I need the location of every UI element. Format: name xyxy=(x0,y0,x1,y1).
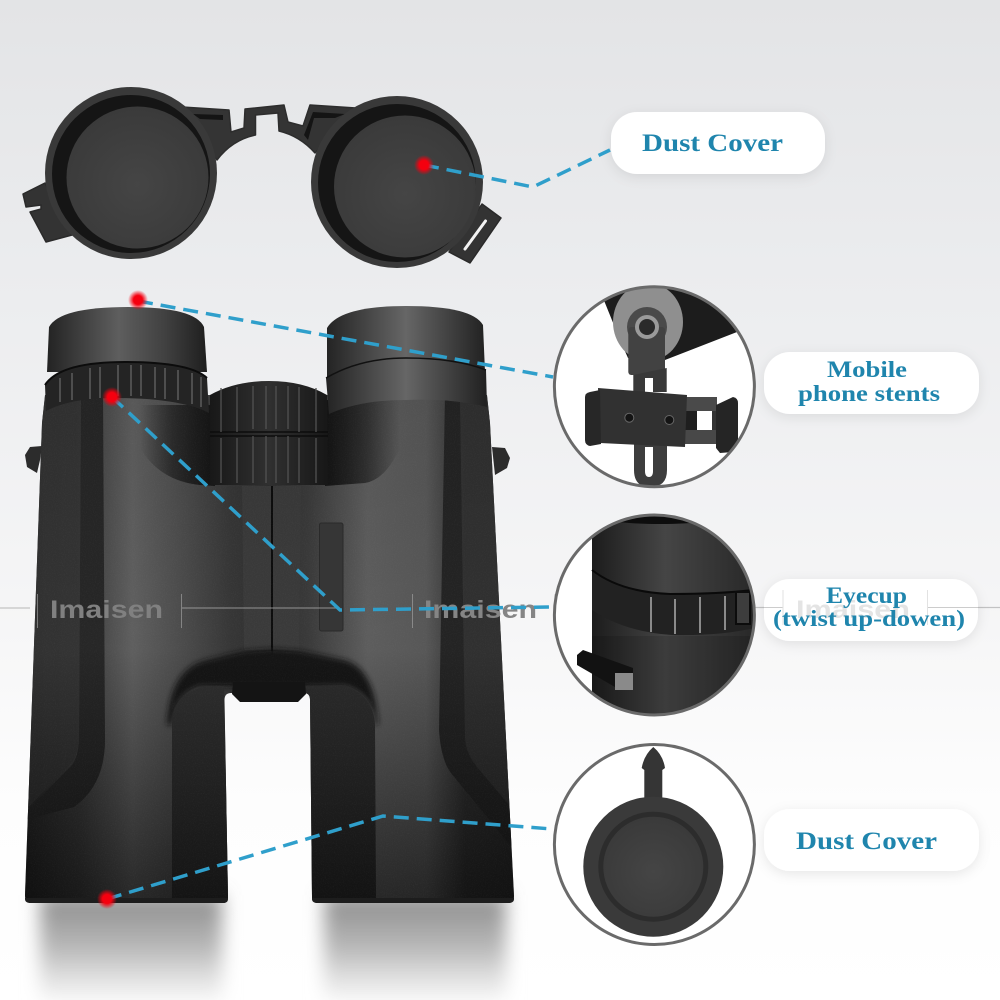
watermark: Imaisen left: Imaisen xyxy=(50,596,163,624)
strap lug xyxy=(577,650,633,690)
label: Mobile phone stents xyxy=(764,352,979,414)
top of cup xyxy=(622,516,690,524)
barrel shadow xyxy=(660,636,674,713)
callout: eyecup leader xyxy=(112,397,550,610)
right clamp pad xyxy=(716,397,738,453)
product: binoculars xyxy=(20,306,520,910)
detail circle: phone mount xyxy=(554,270,754,487)
label: Eyecup twist: Imaisen xyxy=(796,596,910,624)
saddle recess left xyxy=(140,405,215,486)
focus knob underside xyxy=(232,682,306,702)
base rims xyxy=(25,898,514,903)
left eyecup xyxy=(45,307,209,413)
right cap xyxy=(311,96,483,268)
upper bracket xyxy=(627,307,667,375)
left dark grip panel xyxy=(25,395,105,820)
left neck strap lug xyxy=(25,446,42,473)
binocular ground shadows xyxy=(40,895,506,1000)
label: Dust Cover bottom: Dust Cover xyxy=(796,828,937,855)
right eyecup xyxy=(326,306,487,414)
label: Dust Cover top xyxy=(611,112,825,174)
left cap strap tab xyxy=(23,183,72,242)
callout: phone stent leader xyxy=(138,301,553,377)
screws xyxy=(625,413,674,424)
label: Mobile phone stents: phone stents xyxy=(798,381,940,406)
centre hinge xyxy=(251,486,282,651)
tether stem xyxy=(642,747,665,805)
callout: top dust cover leader xyxy=(424,150,610,187)
right slider arms xyxy=(685,397,717,444)
right inner leg xyxy=(305,686,376,903)
watermark ticks xyxy=(38,594,555,628)
clamp body xyxy=(598,388,687,447)
focus wheel xyxy=(210,381,328,485)
label: Eyecup twist: (twist up-dowen) xyxy=(773,606,965,631)
eyepiece xyxy=(604,289,736,360)
cover rim xyxy=(583,797,723,937)
right outer panel xyxy=(487,396,510,805)
left outer panel xyxy=(28,396,45,808)
detail circle: eyecup xyxy=(552,514,756,716)
upper strap xyxy=(633,368,667,392)
red marker dots xyxy=(97,155,434,909)
right cap strap tab xyxy=(449,204,501,263)
vertical darkening xyxy=(20,395,520,910)
rubber grain xyxy=(198,410,504,876)
connecting bridge xyxy=(182,105,356,160)
callout: lower dust cover leader xyxy=(107,816,552,899)
front arch xyxy=(167,649,378,725)
cover centre xyxy=(603,817,703,917)
detail circle: objective dust cover xyxy=(554,744,754,944)
cover groove xyxy=(598,812,708,922)
label: Dust Cover bottom xyxy=(764,809,979,871)
eyecup twist ring xyxy=(45,362,209,413)
label: Mobile phone stents: Mobile xyxy=(827,357,907,382)
left cap xyxy=(45,87,217,259)
lower strap xyxy=(634,444,667,487)
saddle recess right xyxy=(325,400,400,486)
right neck strap lug xyxy=(492,447,510,475)
main body xyxy=(20,395,520,910)
watermark: Imaisen centre: Imaisen xyxy=(424,596,537,624)
twist ring xyxy=(592,570,754,635)
left inner leg xyxy=(172,686,229,903)
watermark line xyxy=(0,606,1000,609)
label: Eyecup twist xyxy=(764,579,978,641)
side window xyxy=(320,523,343,631)
silver ocular ring xyxy=(613,288,683,356)
product: double dust cover xyxy=(23,87,501,268)
barrel xyxy=(592,522,752,714)
left clamp pad xyxy=(585,390,601,446)
label: Eyecup twist: Eyecup xyxy=(826,583,907,608)
label: Dust Cover top: Dust Cover xyxy=(642,130,783,157)
right dark grip panel xyxy=(439,395,514,850)
